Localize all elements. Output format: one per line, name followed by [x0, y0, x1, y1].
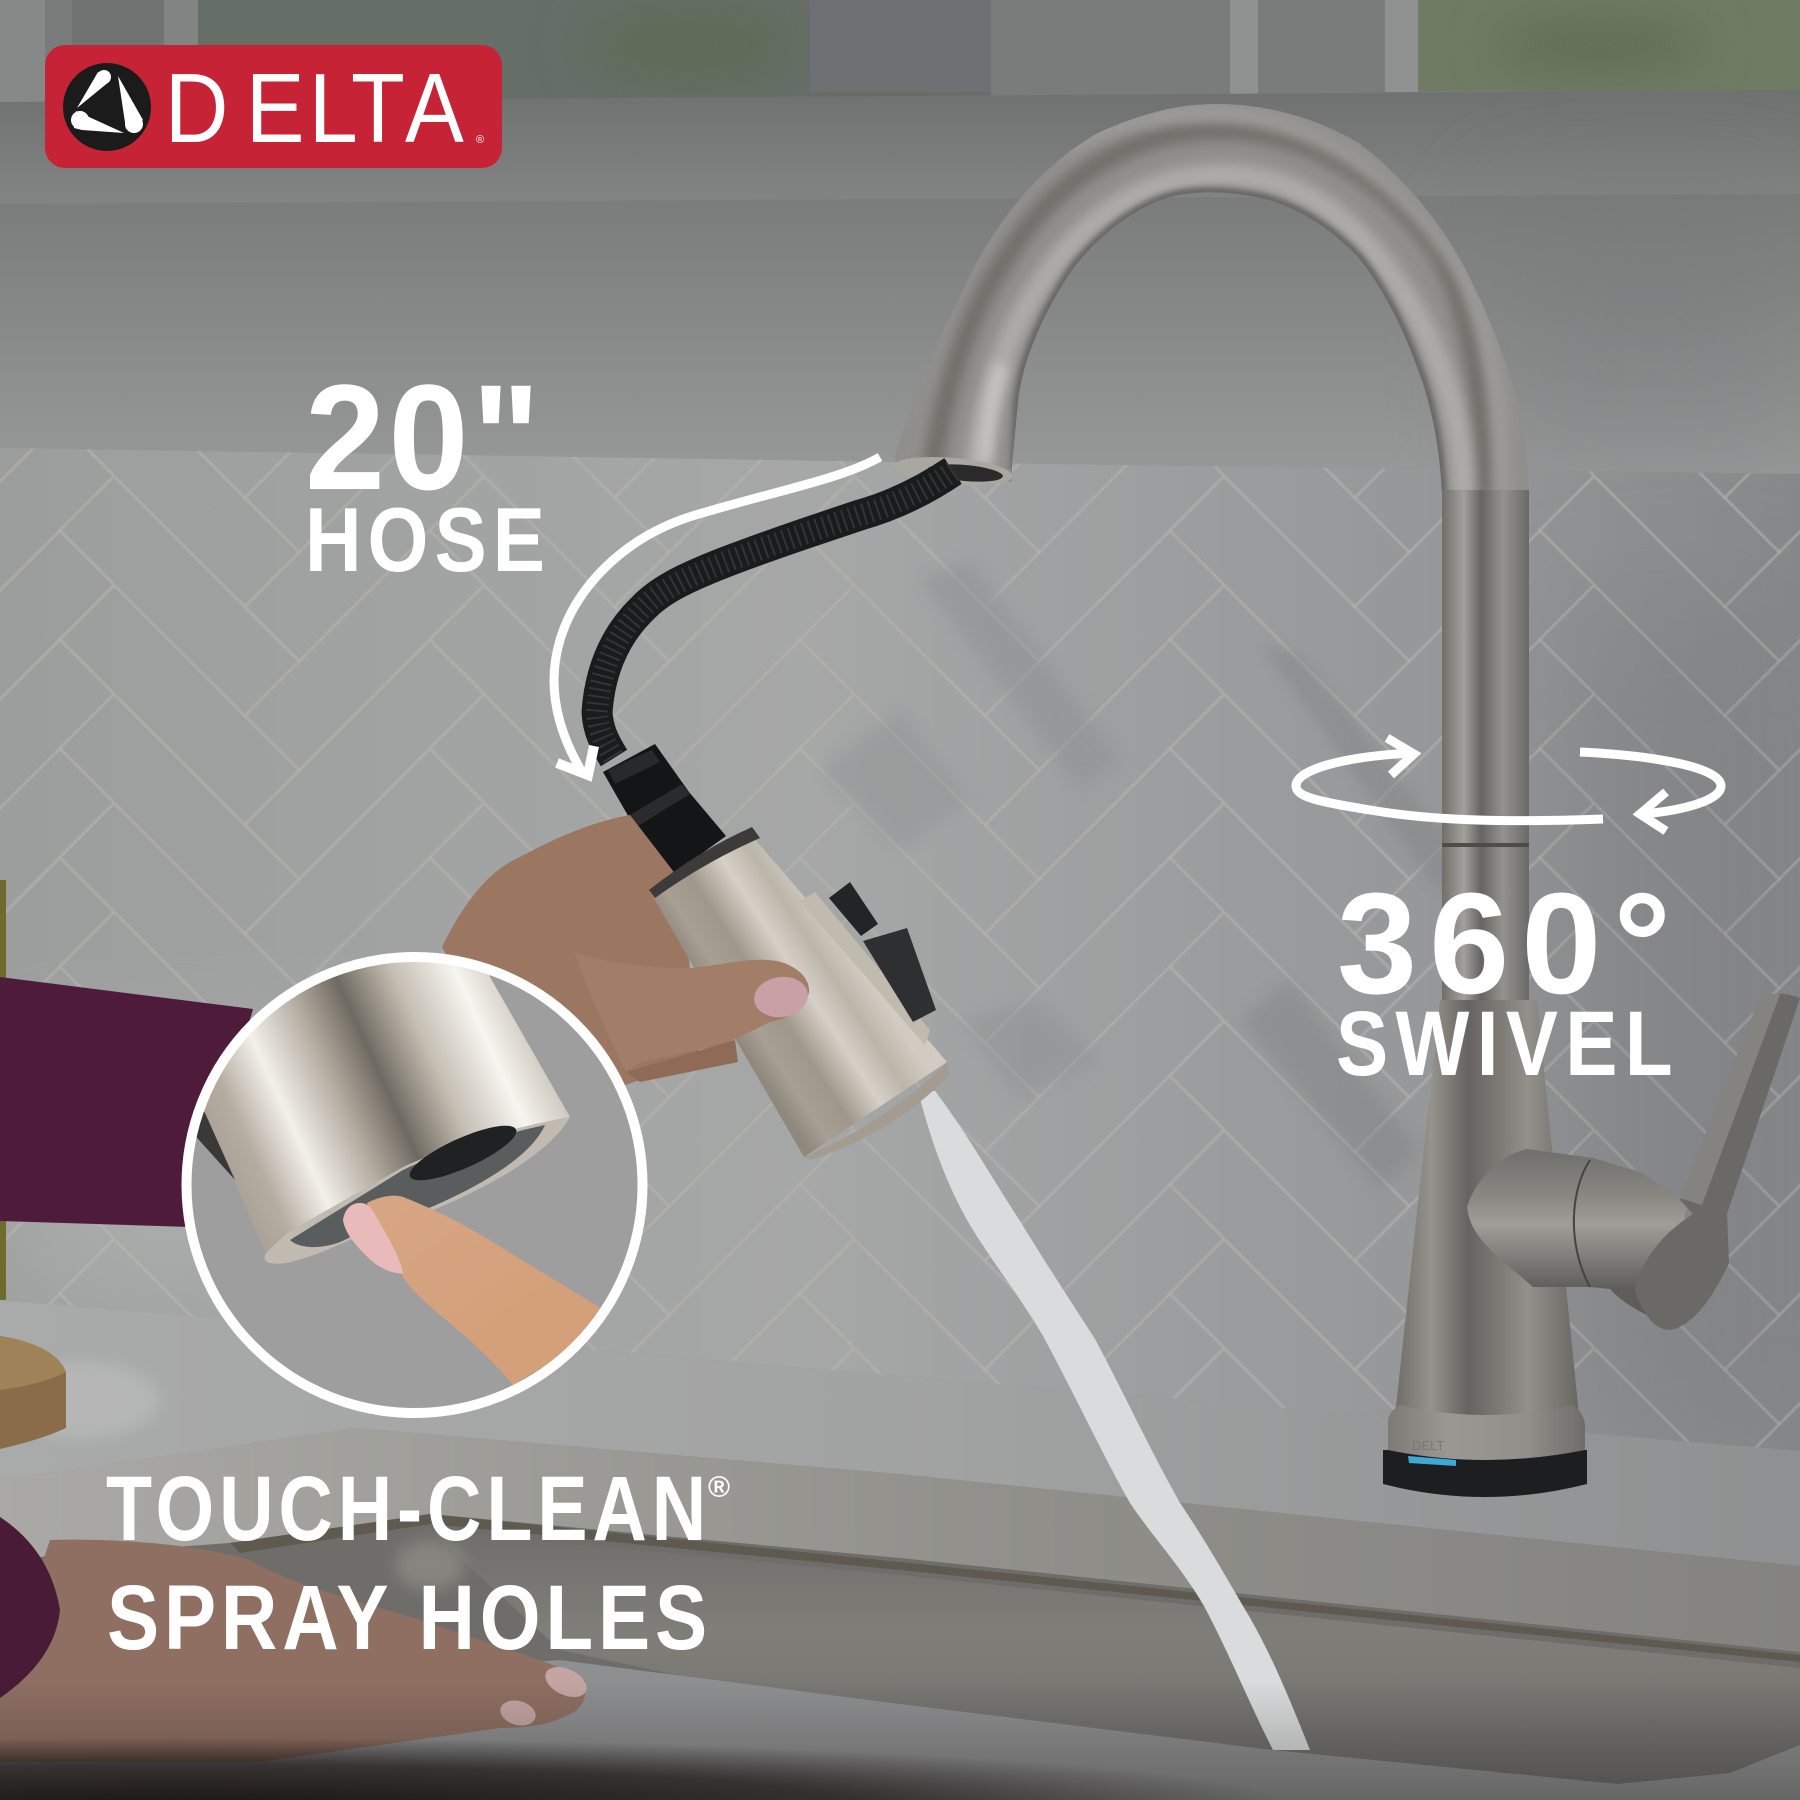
- callout: touch-clean spray holes: ®: [708, 1471, 730, 1504]
- faucet handle: [1467, 993, 1800, 1330]
- callout: touch-clean spray holes: TOUCH-CLEAN: [106, 1457, 706, 1560]
- faucet spout outlet: [892, 453, 1014, 489]
- faucet spout: [880, 90, 1540, 500]
- sink: [0, 1514, 1800, 1800]
- braided hose: [597, 471, 953, 758]
- faucet: [880, 90, 1800, 1497]
- bottom vignette: [0, 1680, 1800, 1800]
- swivel arrows: [1296, 738, 1721, 831]
- countertop: [0, 1300, 1800, 1655]
- inset fingertip: [367, 1196, 620, 1385]
- wood block: [0, 1336, 66, 1449]
- herringbone marble backsplash: [0, 448, 1800, 1451]
- water stream: [918, 1091, 1310, 1750]
- callout: 20 inch hose: 20": [305, 354, 540, 522]
- lower hand: [0, 1540, 591, 1762]
- finger nails: [498, 1661, 591, 1729]
- faucet base: [1383, 1000, 1587, 1497]
- Delta logo badge: [45, 45, 502, 168]
- faucet stem: [1442, 490, 1529, 1007]
- upper wall: [0, 90, 1800, 474]
- registered mark: ®: [476, 134, 484, 146]
- callout: 20 inch hose: [305, 354, 545, 590]
- inset finger nail: [343, 1203, 403, 1273]
- callout: touch-clean spray holes: SPRAY HOLES: [107, 1567, 707, 1669]
- callout: 20 inch hose: HOSE: [305, 488, 545, 590]
- thumb nail: [751, 973, 811, 1021]
- olive bottle edge: [0, 880, 6, 1300]
- window strip: [0, 0, 1800, 205]
- callout: 360 degree swivel: [1336, 863, 1673, 1095]
- touch sensor ring: [1383, 1450, 1587, 1497]
- lower sleeve: [0, 1517, 60, 1698]
- blue LED indicator: [1408, 1456, 1456, 1466]
- upper hand holding sprayer: [442, 815, 700, 1085]
- inset circle: touch-clean spray holes: [170, 920, 642, 1413]
- logo emblem: [63, 63, 151, 151]
- callout: touch-clean spray holes: [106, 1457, 730, 1669]
- inset sprayer cylinder: [204, 962, 570, 1254]
- inset sprayer face: [264, 1117, 570, 1264]
- callout: 360 degree swivel: SWIVEL: [1336, 993, 1673, 1095]
- base logo mark: DELT: [1412, 1438, 1444, 1453]
- callout: 360 degree swivel: 360°: [1337, 863, 1671, 1024]
- left arm sleeve: [0, 977, 253, 1227]
- sprayer head: [649, 827, 950, 1160]
- thumb over sprayer: [574, 953, 811, 1082]
- hose length arrow: [554, 457, 880, 775]
- hose connector: [603, 744, 726, 875]
- logo wordmark: DELTA: [165, 54, 464, 163]
- sprayer button: [800, 882, 936, 1045]
